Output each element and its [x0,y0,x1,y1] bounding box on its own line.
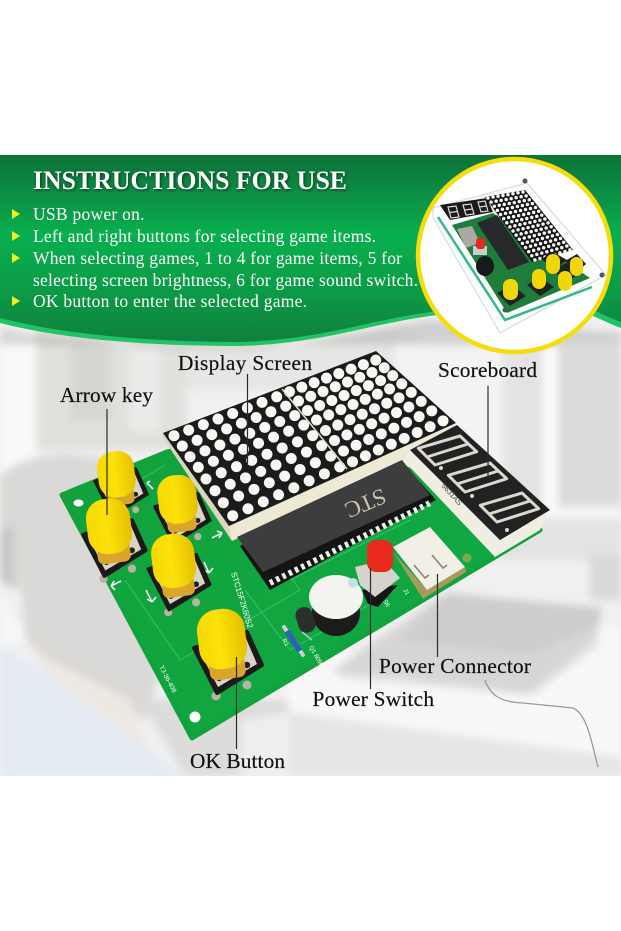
matrix dots [174,360,443,516]
matrix face [163,351,456,526]
button: front left [83,496,146,583]
buzzer [309,575,363,636]
mini board [452,213,590,313]
part number: 5631AS [440,481,464,507]
mini LED matrix [485,190,573,262]
board silkscreen text: S6 [381,599,390,609]
mini chip [477,215,529,270]
instruction text: Left and right buttons for selecting game items. [33,226,376,246]
photo background [0,155,621,776]
mounting holes [74,500,472,722]
digits [418,436,539,522]
label: scoreboard: Scoreboard [438,358,537,382]
board silkscreen text: TJ-36-408 [157,665,178,694]
button: front right [148,531,210,616]
button: back left [95,449,147,522]
board silkscreen text: J1 [401,588,410,597]
label: power switch: Power Switch [312,687,434,711]
title: INSTRUCTIONS FOR USE [33,166,347,195]
board silkscreen text [157,571,410,694]
instruction text: When selecting games, 1 to 4 for game items, 5 for [33,248,402,268]
circuit board [62,420,540,738]
board silkscreen text: R1 [280,638,290,648]
button: back right [155,473,210,549]
resistor [284,627,303,655]
board silkscreen text: Q1 8050 [307,645,324,669]
instruction text: OK button to enter the selected game. [33,291,307,311]
red power switch [355,540,400,607]
case screws [502,178,604,312]
board body [62,420,540,738]
instruction text [33,204,418,311]
arrow key buttons [83,449,210,616]
matrix housing [163,422,456,541]
transistor [293,605,318,640]
STC logo: STC [341,483,390,523]
face [410,425,550,540]
chip top [237,460,430,572]
silk traces [90,465,410,660]
circle frame [418,159,611,352]
microcontroller chip [237,460,436,590]
mini buzzer [476,256,494,276]
label: power connector: Power Connector [379,654,531,678]
instruction text: USB power on. [33,204,144,224]
direction arrows [85,481,222,602]
OK button [194,606,262,700]
seven-segment scoreboard [405,425,550,557]
product photo in circle [418,159,611,352]
pins [270,503,430,583]
mini USB [457,226,480,248]
panel: instructions banner [0,155,621,349]
mini yellow buttons [497,252,586,306]
acrylic case [433,183,606,333]
LED matrix display [163,351,456,541]
instruction text: selecting screen brightness, 6 for game sound switch. [33,270,418,290]
socket [240,462,436,590]
mini red switch [473,238,487,255]
housing side [405,450,550,557]
label: display screen: Display Screen [178,351,312,375]
bullet markers [12,209,20,306]
page margin bottom [0,776,621,931]
board silkscreen text: STC15F2K60S2 [229,571,255,630]
leader lines [107,374,488,749]
mini scoreboard [440,198,493,220]
USB power connector [393,527,466,599]
label: OK button: OK Button [190,749,285,773]
label: arrow key: Arrow key [60,383,153,407]
